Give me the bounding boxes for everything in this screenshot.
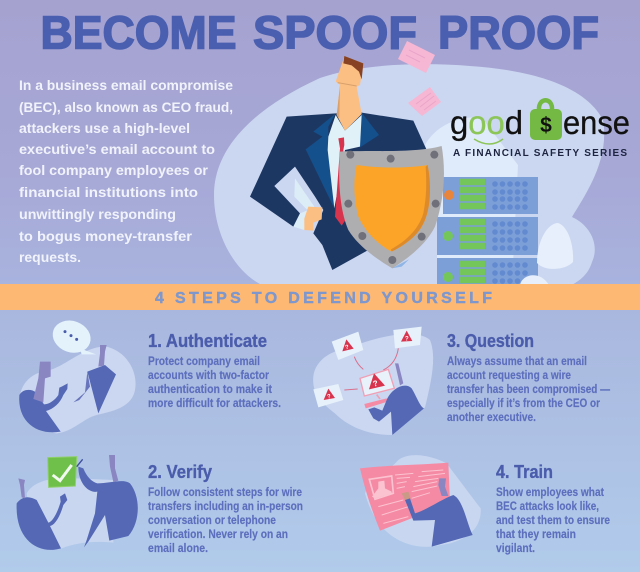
illustration: person at pink profile screen xyxy=(360,455,481,547)
body text: and test them to ensure xyxy=(496,513,610,527)
body text xyxy=(447,354,610,424)
logo smile xyxy=(474,139,503,144)
body text: Protect company email xyxy=(148,354,260,368)
logo tagline: A FINANCIAL SAFETY SERIES xyxy=(453,148,627,159)
body text xyxy=(148,485,303,555)
hero background blob xyxy=(214,64,604,285)
body text: especially if it’s from the CEO or xyxy=(447,396,600,410)
body text: transfer has been compromised — xyxy=(447,382,610,396)
body text: Always assume that an email xyxy=(447,354,587,368)
shirt cuff xyxy=(293,210,308,230)
heading: 1. Authenticate xyxy=(148,331,267,351)
illustration: person at monitor with alerts: ? xyxy=(372,379,379,389)
illustration: person at monitor with alerts: ? xyxy=(345,344,350,351)
title: SPOOF xyxy=(253,6,417,58)
header background xyxy=(0,0,640,285)
body text: another executive. xyxy=(447,410,536,424)
body text: more difficult for attackers. xyxy=(148,396,281,410)
illustration: person at monitor with alerts: ? xyxy=(327,394,332,401)
logo word: ense: ense xyxy=(563,105,630,142)
lapels xyxy=(306,113,336,208)
intro text block xyxy=(19,78,233,265)
body text: authentication to make it xyxy=(148,382,272,396)
hair xyxy=(343,56,363,79)
heading: 3. Question xyxy=(447,331,534,351)
orange banner xyxy=(0,284,640,310)
heading: 4. Train xyxy=(496,462,553,482)
head and neck xyxy=(336,57,363,131)
body text: conversation or telephone xyxy=(148,513,276,527)
body text: account requesting a wire xyxy=(447,368,571,382)
body text: verification. Never rely on an xyxy=(148,527,288,541)
intro text block: requests. xyxy=(19,250,81,265)
pale blobs beside servers xyxy=(520,223,573,285)
icon: green padlock xyxy=(530,100,562,140)
step 3: question xyxy=(313,327,610,435)
step 1: authenticate xyxy=(19,315,281,433)
businessman figure xyxy=(250,56,427,270)
body text xyxy=(496,485,610,555)
body text: email alone. xyxy=(148,541,208,555)
body text: Show employees what xyxy=(496,485,604,499)
shield xyxy=(339,146,444,268)
pale blob behind logo xyxy=(425,117,518,285)
title xyxy=(40,6,599,58)
shirt side xyxy=(294,178,314,209)
tie xyxy=(335,137,347,226)
icon: floating pink documents xyxy=(398,41,441,116)
body text: vigilant. xyxy=(496,541,535,555)
intro text block: unwittingly responding xyxy=(19,207,176,222)
step 4: train xyxy=(360,455,610,555)
intro text block: attackers use a high-level xyxy=(19,121,190,136)
body text: BEC attacks look like, xyxy=(496,499,599,513)
illustration: person at monitor with alerts: ? xyxy=(405,337,409,343)
logo word: good: good xyxy=(450,105,523,142)
illustration: person at monitor with alerts xyxy=(313,327,433,435)
banner heading: 4 STEPS TO DEFEND YOURSELF xyxy=(155,290,492,307)
intro text block: executive’s email account to xyxy=(19,142,215,157)
lower background xyxy=(0,309,640,572)
heading: 2. Verify xyxy=(148,462,212,482)
icon: green padlock: $ xyxy=(540,114,552,137)
intro text block: In a business email compromise xyxy=(19,78,233,93)
body text: accounts with two-factor xyxy=(148,368,269,382)
suit xyxy=(250,113,427,270)
title: PROOF xyxy=(438,6,599,58)
body text: Follow consistent steps for wire xyxy=(148,485,302,499)
title: BECOME xyxy=(40,6,236,58)
body text: transfers including an in-person xyxy=(148,499,303,513)
body text: that they remain xyxy=(496,527,576,541)
logo: good sense xyxy=(450,100,630,159)
illustration: two people talking xyxy=(19,315,136,433)
body text xyxy=(148,354,281,410)
hand xyxy=(304,207,322,231)
intro text block: (BEC), also known as CEO fraud, xyxy=(19,100,233,115)
intro text block: to bogus money-transfer xyxy=(19,229,193,244)
intro text block: fool company employees or xyxy=(19,163,209,178)
shirt xyxy=(328,115,362,208)
step 2: verify xyxy=(17,455,303,555)
illustration: two people with checkmark xyxy=(17,455,138,550)
server racks xyxy=(437,177,538,285)
intro text block: financial institutions into xyxy=(19,185,198,200)
